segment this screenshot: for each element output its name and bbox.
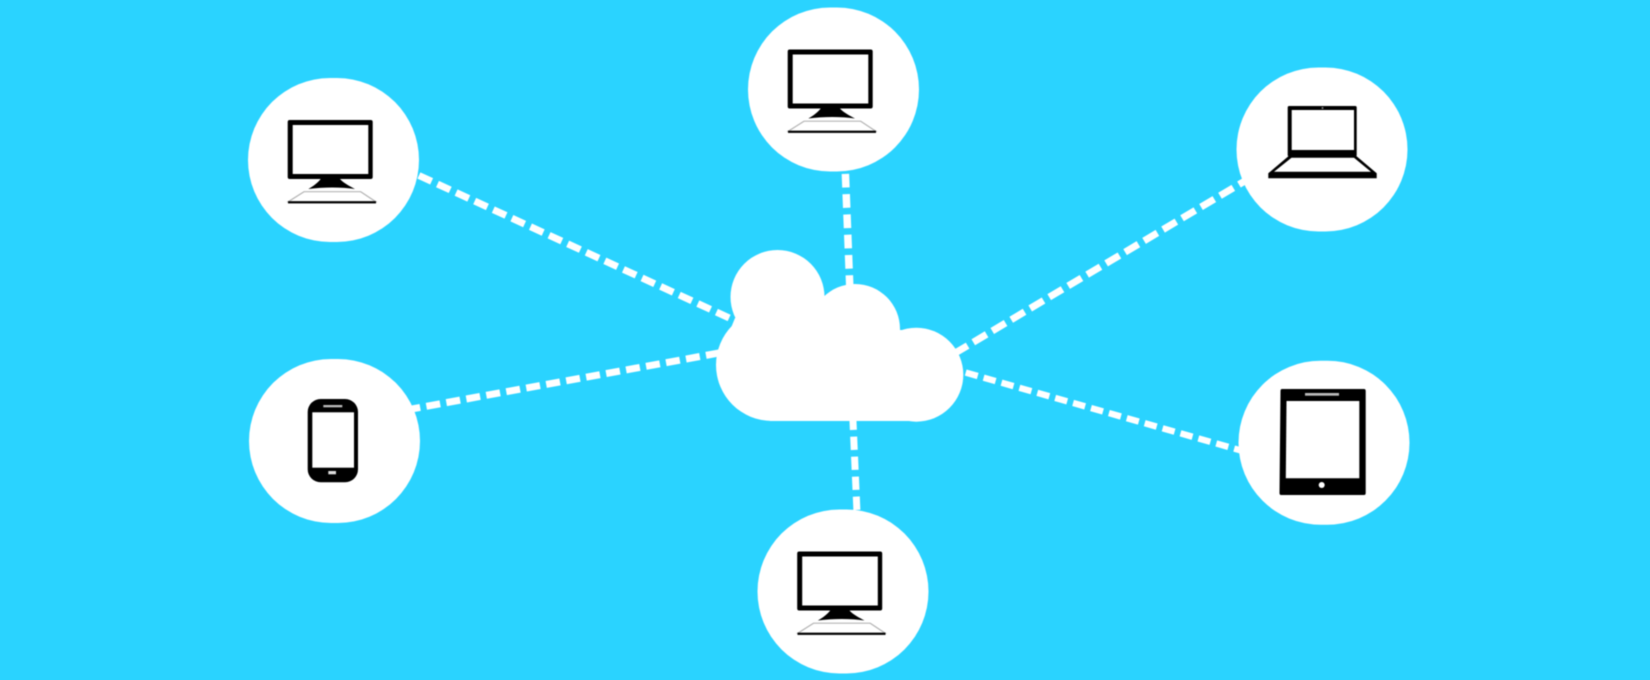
icon: laptop bbox=[1268, 106, 1377, 178]
connector: tablet to cloud bbox=[966, 373, 1250, 453]
node: top monitor bbox=[748, 8, 919, 172]
connector: top-left monitor to cloud bbox=[419, 176, 735, 321]
icon: monitor bbox=[797, 552, 886, 635]
connector: phone to cloud bbox=[406, 351, 730, 410]
node: phone bbox=[249, 359, 420, 523]
icon: smartphone bbox=[308, 399, 358, 482]
connector: bottom monitor to cloud bbox=[853, 417, 857, 515]
node: bottom monitor bbox=[758, 510, 928, 674]
cloud bbox=[716, 250, 963, 422]
icon: monitor bbox=[788, 50, 876, 133]
node: top-left monitor bbox=[248, 78, 419, 242]
node: tablet bbox=[1238, 361, 1410, 525]
icon: tablet bbox=[1280, 389, 1366, 495]
dashed connectors bbox=[406, 172, 1260, 515]
icon: monitor bbox=[288, 120, 376, 203]
connector: top monitor to cloud bbox=[845, 174, 850, 295]
connector: laptop to cloud bbox=[954, 172, 1260, 354]
node: laptop bbox=[1236, 68, 1408, 232]
